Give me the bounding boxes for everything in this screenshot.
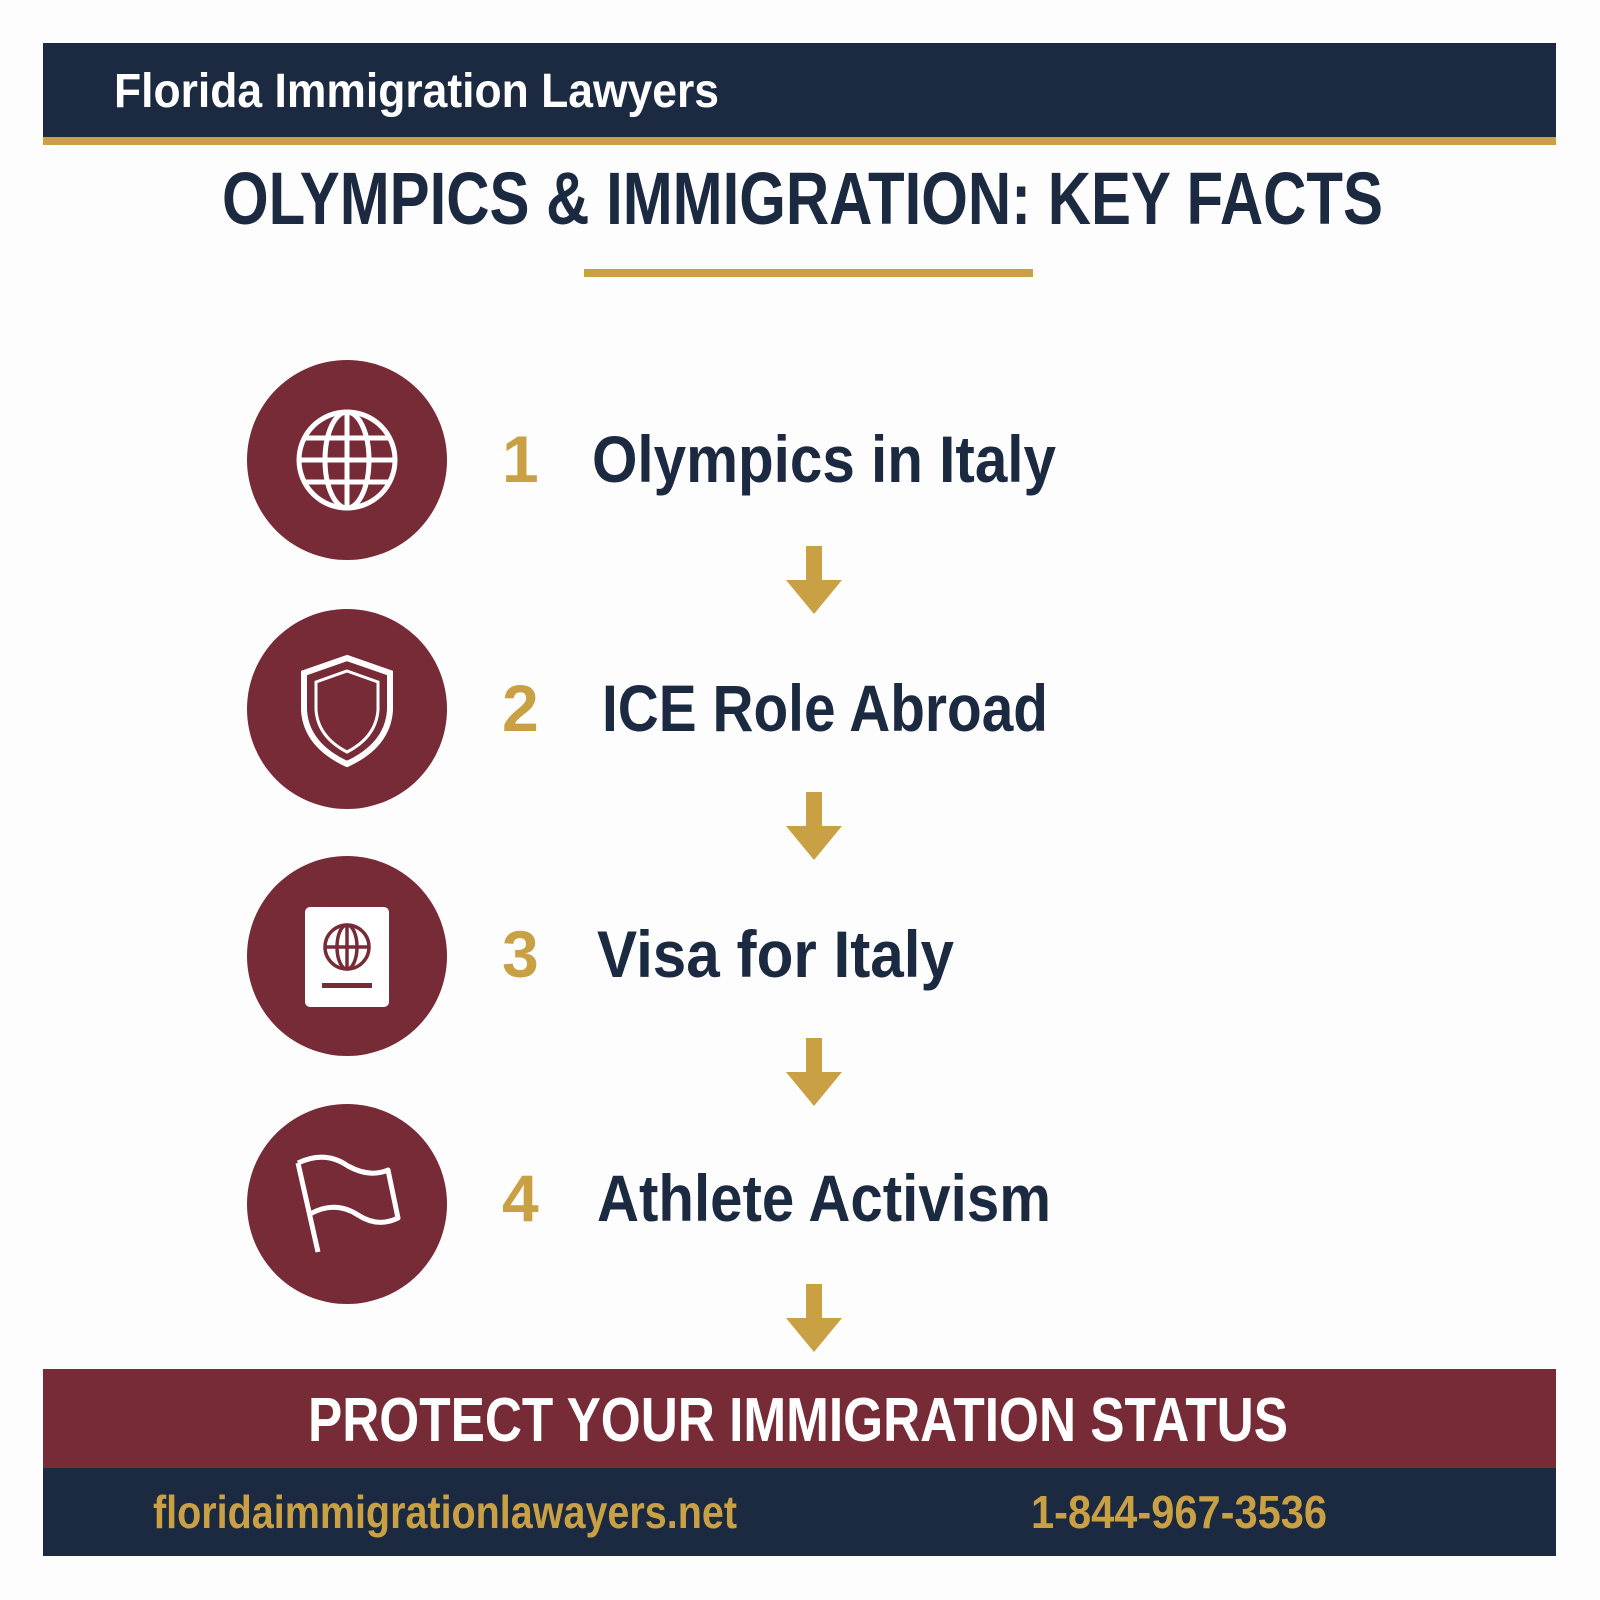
number 2: 2 (502, 671, 539, 745)
footer contact bar (43, 1468, 1556, 1556)
arrow 1 (786, 546, 842, 614)
label: Visa for Italy: Visa for Italy (597, 917, 954, 991)
arrow 4 (786, 1284, 842, 1352)
icon: flag (247, 1104, 447, 1304)
number 3: 3 (502, 917, 539, 991)
label: ICE Role Abroad: ICE Role Abroad (602, 671, 1048, 745)
header bar (43, 43, 1556, 145)
call to action banner: PROTECT YOUR IMMIGRATION STATUS (308, 1386, 1288, 1455)
step 2 (247, 609, 1048, 809)
header brand text: Florida Immigration Lawyers (114, 65, 719, 118)
step 4 (247, 1104, 1051, 1304)
number 1: 1 (502, 422, 539, 496)
phone: 1-844-967-3536 (1031, 1486, 1327, 1538)
arrow 3 (786, 1038, 842, 1106)
label: Olympics in Italy: Olympics in Italy (592, 422, 1056, 496)
number 4: 4 (502, 1161, 539, 1235)
call to action banner (43, 1369, 1556, 1468)
step 3 (247, 856, 954, 1056)
label: Athlete Activism: Athlete Activism (597, 1161, 1051, 1235)
title underline (584, 269, 1033, 277)
icon: globe (247, 360, 447, 560)
website: floridaimmigrationlawayers.net (153, 1486, 737, 1538)
icon: passport (247, 856, 447, 1056)
arrow 2 (786, 792, 842, 860)
icon: shield (247, 609, 447, 809)
step 1 (247, 360, 1056, 560)
